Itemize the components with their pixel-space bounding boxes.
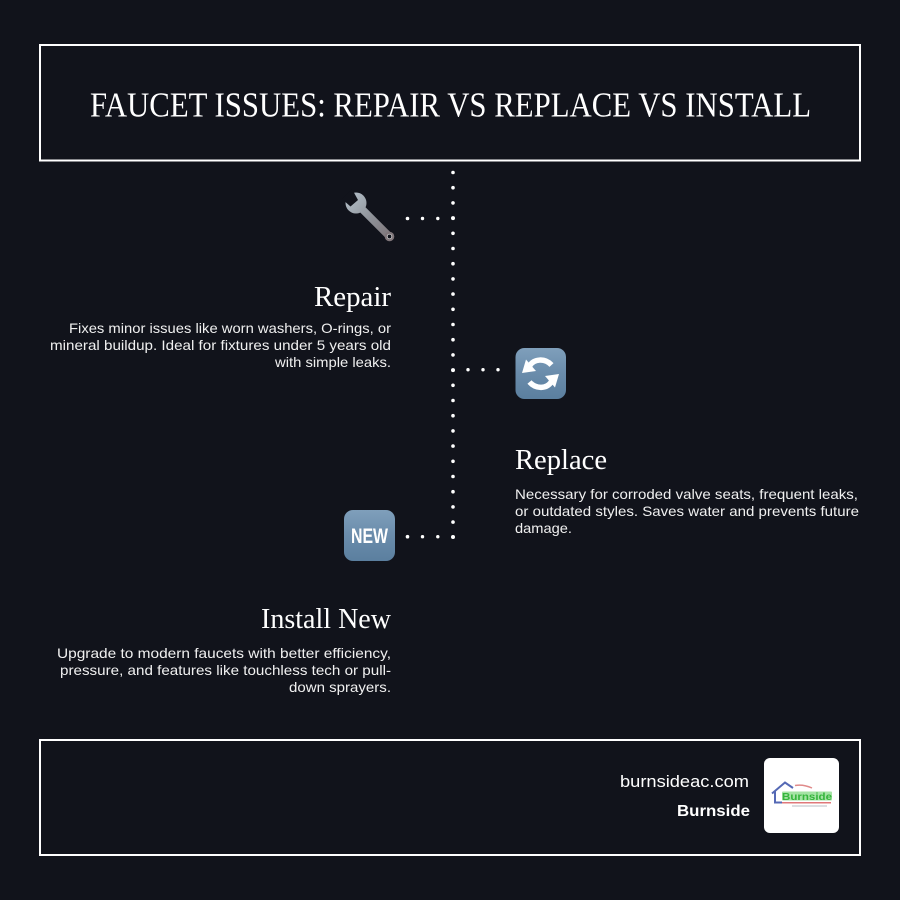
icon: replace arrows bbox=[516, 348, 566, 399]
title panel bbox=[40, 45, 860, 160]
text: replace description bbox=[515, 486, 859, 536]
section: replace bbox=[515, 445, 859, 536]
text: install description: pressure, and features like touchless tech or pull- bbox=[60, 662, 391, 678]
icon: new: NEW bbox=[351, 525, 388, 548]
footer: logo: Burnside bbox=[782, 792, 833, 803]
footer: logo bbox=[764, 758, 839, 833]
heading: repair: Repair bbox=[314, 282, 392, 313]
text: repair description: Fixes minor issues like worn washers, O-rings, or bbox=[69, 320, 391, 336]
icon: new bbox=[344, 510, 395, 561]
title: FAUCET ISSUES: REPAIR VS REPLACE VS INSTALL bbox=[90, 86, 811, 124]
text: repair description: mineral buildup. Ideal for fixtures under 5 years old bbox=[50, 337, 391, 353]
icon: wrench bbox=[342, 189, 394, 241]
text: install description: Upgrade to modern faucets with better efficiency, bbox=[57, 645, 391, 661]
text: repair description bbox=[50, 320, 391, 370]
text: install description: down sprayers. bbox=[289, 679, 391, 695]
text: replace description: Necessary for corroded valve seats, frequent leaks, bbox=[515, 486, 858, 502]
timeline: dotted connectors bbox=[406, 171, 500, 539]
footer: brand name: Burnside bbox=[677, 803, 750, 820]
footer: website: burnsideac.com bbox=[620, 772, 749, 791]
text: install description bbox=[57, 645, 391, 695]
section: install new bbox=[57, 604, 392, 695]
text: replace description: or outdated styles. Saves water and prevents future bbox=[515, 503, 859, 519]
heading: install new: Install New bbox=[261, 604, 392, 635]
text: replace description: damage. bbox=[515, 520, 572, 536]
footer panel bbox=[40, 740, 860, 855]
heading: replace: Replace bbox=[515, 445, 607, 476]
section: repair bbox=[50, 282, 392, 370]
text: repair description: with simple leaks. bbox=[274, 354, 391, 370]
